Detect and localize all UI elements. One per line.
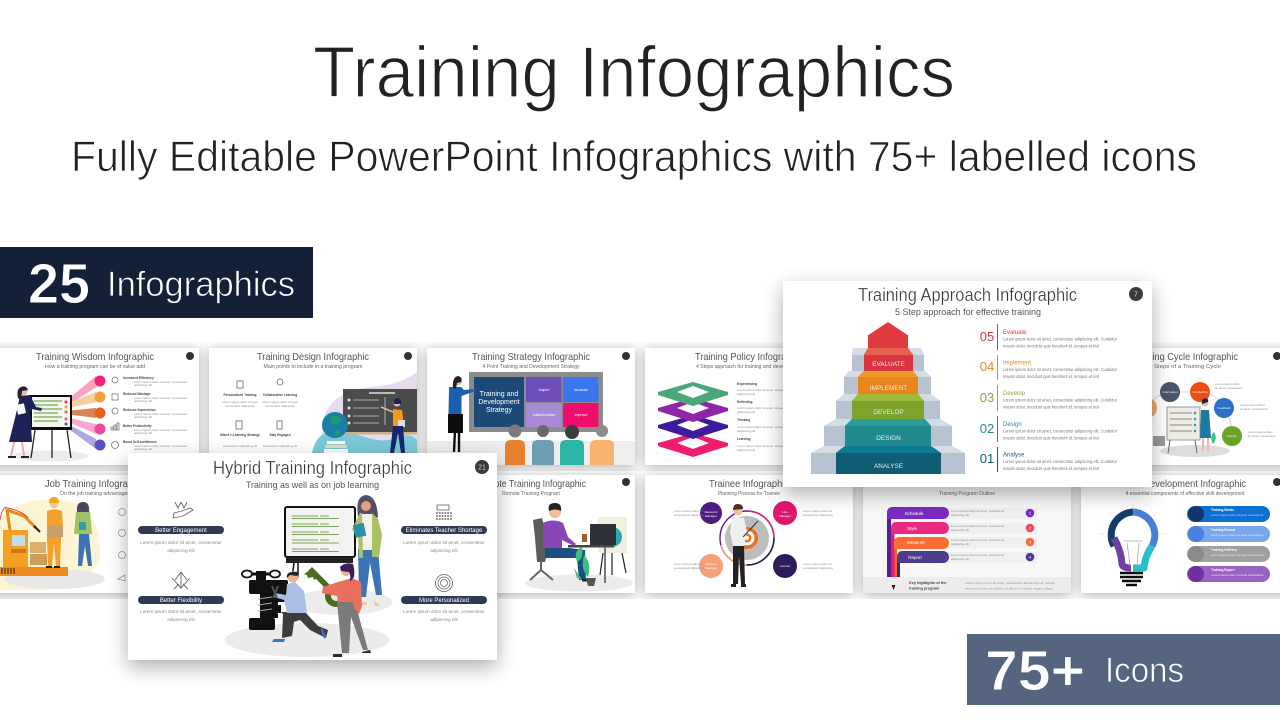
cycle nodes (1137, 382, 1242, 446)
slide heading: Training Wisdom Infographic (36, 351, 154, 363)
slide heading: Job Training Infographic (45, 478, 145, 490)
outline rows: 3 (1029, 540, 1032, 544)
step list: Experiencing (737, 382, 757, 386)
footer text (909, 581, 1055, 590)
step 01 text: Analyse (1003, 452, 1025, 458)
point list (123, 376, 187, 451)
small icons and labels: consectetur adipiscing elit (263, 444, 297, 448)
page badge (1129, 287, 1143, 301)
outline rows: Lorem ipsum dolor sit amet, consectetur (951, 509, 1004, 513)
slide heading: Training Design Infographic (257, 351, 369, 363)
outline rows: adipiscing elit (951, 557, 969, 561)
small icons and labels: Stay Engaged (269, 433, 291, 437)
man with arrow (730, 504, 758, 587)
step list (737, 382, 790, 452)
point list: Lorem ipsum dolor sit amet, consectetur (134, 428, 187, 432)
numbered circles (94, 376, 106, 450)
cycle nodes: Report (1227, 434, 1237, 438)
benefit: better engagement: Lorem ipsum dolor sit amet, consectetur (140, 540, 222, 545)
point list: Lorem ipsum dolor sit amet, consectetur (134, 444, 187, 448)
captions: Lorem ipsum dolor sit (803, 562, 832, 566)
arrow top (867, 322, 909, 348)
light bulb (1098, 504, 1167, 585)
step 04 text: mauris dolor, tincidunt quis hendrerit id, tempus at nisl (1003, 374, 1099, 379)
benefit icons (118, 508, 126, 581)
panel: job training slide (0, 475, 199, 593)
role nodes: Account (706, 562, 717, 566)
panel: skill development slide (1081, 475, 1280, 593)
outline rows: Style (907, 526, 917, 531)
beams to numbered circles (66, 376, 98, 449)
step: analyse: ANALYSE (874, 463, 903, 470)
illustration: trainer at board (1153, 398, 1230, 457)
role nodes: Learner (780, 564, 790, 568)
strategy board (469, 372, 603, 432)
benefit: better engagement: Better Engagement (155, 528, 207, 534)
step 03 text (980, 385, 1118, 411)
benefit: eliminates teacher shortage: Eliminates Teacher Shortage (406, 528, 483, 534)
footer text: Lorem ipsum dolor sit amet, consectetur adipiscing elit, sed do (965, 581, 1055, 585)
outline rows: 2 (1029, 526, 1032, 530)
captions: consectetur adipiscing (803, 566, 833, 570)
page badge (186, 352, 194, 360)
illustration: remote learner at desk (525, 503, 633, 592)
slide heading: Skill Development Infographic (1124, 478, 1246, 490)
point list: Lorem ipsum dolor sit amet, consectetur (134, 380, 187, 384)
step 01 text (980, 447, 1118, 472)
step 01 text: 01 (980, 451, 994, 466)
banner label: Icons (1105, 651, 1184, 690)
footer text: training program (909, 586, 940, 590)
step 02 text (980, 416, 1118, 442)
colleague (74, 502, 92, 566)
slide heading: Training Cycle Infographic (1132, 351, 1238, 363)
slide heading: Trainee Infographic (709, 478, 789, 490)
small icons and labels: consectetur adipiscing (265, 404, 295, 408)
strategy board: Training and (480, 391, 518, 398)
benefit: more personalized: adipiscing elit (430, 617, 459, 622)
benefit: better flexibility: adipiscing elit (167, 617, 196, 622)
slide subheading: How a training program can be of value add (45, 364, 145, 370)
step: analyse (836, 446, 941, 474)
captions: Lorem ipsum dolor sit (674, 509, 703, 513)
role nodes: Resource (705, 510, 718, 514)
component pills: Lorem ipsum dolor sit amet consectetur (1211, 533, 1264, 537)
point list: Boost Self-confidence (123, 440, 157, 444)
point list: Lorem ipsum dolor sit amet, consectetur (134, 412, 187, 416)
component pills: Lorem ipsum dolor sit amet consectetur (1211, 513, 1264, 517)
key (304, 569, 344, 604)
step: evaluate (864, 348, 913, 371)
step 04 text (980, 355, 1118, 380)
presenter (448, 376, 476, 452)
step 01 text: mauris dolor, tincidunt quis hendrerit id, tempus at nisl (1003, 466, 1099, 471)
slide subheading: Training Program Outline (939, 491, 995, 497)
panel: training wisdom slide (0, 348, 199, 465)
cycle nodes: Information (1162, 390, 1178, 394)
strategy board: Improve (575, 413, 587, 417)
point list: Lorem ipsum dolor sit amet, consectetur (134, 396, 187, 400)
panel: remote training slide (427, 475, 635, 593)
step list: Lorem ipsum dolor sit amet, consectetur (737, 425, 790, 429)
panel: training design slide (209, 348, 417, 465)
robot arm machine (0, 507, 68, 576)
step 01 text: Lorem ipsum dolor sit amet, consectetur adipiscing elit. Curabitur (1003, 459, 1118, 464)
strategy board: Institutionalize (533, 413, 555, 417)
footer text: Key highlights of the (909, 581, 947, 585)
step 02 text: Design (1003, 422, 1022, 428)
page badge (475, 460, 489, 474)
teal hill (312, 430, 417, 453)
strategy board: Inspire (539, 388, 549, 392)
step: implement: IMPLEMENT (870, 385, 907, 392)
step list: adipiscing elit (737, 392, 755, 396)
banner number: 25 (28, 252, 90, 316)
audience (505, 424, 614, 465)
component pills (1187, 506, 1270, 582)
node captions: Lorem ipsum dolor (1215, 382, 1240, 386)
benefit: eliminates teacher shortage: Lorem ipsum dolor sit amet, consectetur (403, 540, 485, 545)
slide heading: Remote Training Infographic (476, 478, 586, 490)
worker (46, 497, 63, 568)
small icons and labels: Lorem ipsum dolor sit amet (222, 400, 258, 404)
benefit: eliminates teacher shortage: adipiscing elit (430, 548, 459, 553)
outline rows: Report (908, 555, 922, 560)
woman with key (322, 563, 371, 657)
page badge (622, 352, 630, 360)
training board (285, 507, 355, 578)
small icons and labels: Personalized Training (224, 393, 257, 397)
step list: adipiscing elit (737, 429, 755, 433)
slide subheading: On the job training advantages (60, 491, 130, 497)
cycle nodes: Conducting (1192, 390, 1208, 394)
step 04 text: Implement (1003, 360, 1031, 366)
small icons and labels: Mixed e-Learning Strategy (220, 433, 260, 437)
slide heading: Training Policy Infographic (695, 351, 803, 363)
slide subheading: 5 Step approach for effective training (895, 307, 1041, 318)
stacked diamond rings (658, 382, 728, 457)
step list: Thinking (737, 418, 750, 422)
page badge (1273, 352, 1280, 360)
outline rows: Measure (907, 540, 925, 545)
point list: Reduced Wastage (123, 392, 151, 396)
step 02 text: 02 (980, 421, 994, 436)
boxes (30, 542, 47, 565)
outline rows: adipiscing elit (951, 542, 969, 546)
cycle nodes: Feedback (1217, 406, 1231, 410)
benefit: better flexibility (138, 572, 224, 622)
slide subheading: 4 Steps approach for training and development (696, 364, 802, 370)
step: evaluate: EVALUATE (872, 361, 905, 368)
captions: Lorem ipsum dolor sit (803, 509, 832, 513)
point list: Reduced Supervision (123, 408, 156, 412)
slide subheading: Training as well as on job learning (246, 480, 379, 491)
captions: consectetur adipiscing (674, 566, 704, 570)
step 05 text: Lorem ipsum dolor sit amet, consectetur adipiscing elit. Curabitur (1003, 336, 1118, 342)
page badge: 21 (478, 464, 486, 472)
step 03 text: Lorem ipsum dolor sit amet, consectetur adipiscing elit. Curabitur (1003, 398, 1118, 402)
small icons and labels: Collaborative Learning (263, 393, 297, 397)
kneeling man (272, 572, 328, 642)
component pills: Training Needs (1211, 508, 1234, 512)
benefit: better flexibility: Better Flexibility (160, 598, 202, 604)
panel: training approach slide (783, 281, 1152, 487)
step list: adipiscing elit (737, 410, 755, 414)
strategy board: Development (478, 399, 520, 406)
small icons and labels: Lorem ipsum dolor sit amet (262, 400, 298, 404)
step 03 text: 03 (980, 390, 994, 405)
panel: 25 infographics banner (0, 247, 313, 318)
page badge (622, 478, 630, 486)
benefit: eliminates teacher shortage (401, 505, 487, 553)
step 05 text: mauris dolor, tincidunt quis hendrerit id, tempus at nisl (1003, 344, 1099, 348)
outline rows: Lorem ipsum dolor sit amet, consectetur (951, 538, 1004, 542)
benefit: more personalized: More Personalized (419, 598, 469, 604)
outline rows: 4 (1029, 554, 1032, 560)
node captions: sit amet, consectetur (1248, 434, 1276, 438)
step 04 text: Lorem ipsum dolor sit amet, consectetur adipiscing elit. Curabitur (1003, 367, 1118, 372)
ground shadows (225, 589, 392, 657)
slide subheading: 6 Steps of a Training Cycle (1149, 364, 1221, 370)
banner number: 75+ (985, 639, 1085, 703)
teacher (381, 398, 405, 453)
panel: training cycle slide (1081, 348, 1280, 465)
outline rows: adipiscing elit (951, 513, 969, 517)
component pills: Lorem ipsum dolor sit amet consectetur (1211, 553, 1264, 557)
slide subheading: 4 essential components of effective skill development (1126, 491, 1245, 497)
captions: consectetur adipiscing (803, 513, 833, 517)
banner label: Infographics (107, 265, 295, 304)
step list: Learning (737, 437, 751, 441)
small icons and labels: consectetur adipiscing elit (223, 444, 257, 448)
step list: Lorem ipsum dolor sit amet, consectetur (737, 444, 790, 448)
point list: Better Productivity (123, 424, 152, 428)
step list: Reflecting (737, 400, 752, 404)
step 02 text: mauris dolor, tincidunt quis hendrerit id, tempus at nisl (1003, 436, 1099, 440)
panel: trainee slide (645, 475, 853, 593)
node captions (1215, 382, 1276, 438)
small icons and labels (220, 379, 298, 448)
role nodes: Line (782, 510, 788, 514)
step: implement (858, 371, 918, 394)
step 02 text: Lorem ipsum dolor sit amet, consectetur adipiscing elit. Curabitur (1003, 428, 1118, 434)
benefit: better engagement: adipiscing elit (167, 548, 196, 553)
panel: training strategy slide (427, 348, 635, 465)
slide subheading: 4 Point Training and Development Strategy (482, 364, 580, 370)
slide heading: Training Strategy Infographic (472, 351, 590, 363)
stair steps (811, 348, 965, 474)
panel: hybrid training slide (128, 453, 497, 660)
outline rows: 1 (1029, 510, 1032, 516)
step 04 text: 04 (980, 359, 994, 374)
panel: training policy slide (645, 348, 853, 465)
floor (427, 441, 635, 465)
slide heading: Training Approach Infographic (858, 285, 1077, 305)
page badge (1273, 478, 1280, 486)
globe (322, 412, 348, 453)
point list: adipiscing elit (134, 383, 152, 387)
benefit: more personalized: Lorem ipsum dolor sit amet, consectetur (403, 609, 485, 614)
outline rows: Lorem ipsum dolor sit amet, consectetur (951, 524, 1004, 528)
ground (5, 569, 105, 589)
step 05 text (980, 324, 1118, 350)
page badge: 7 (1134, 292, 1138, 298)
node captions: sit amet, consectetur (1215, 386, 1243, 390)
slide subheading: Planning Process for Trainee (718, 491, 780, 497)
step list: adipiscing elit (737, 448, 755, 452)
point list: adipiscing elit (134, 447, 152, 451)
role nodes: Manager (779, 514, 791, 518)
step: develop (852, 394, 924, 419)
captions: consectetur adipiscing (674, 513, 704, 517)
step: design: DESIGN (876, 435, 901, 442)
step: design (845, 419, 931, 446)
node captions: Lorem ipsum dolor (1248, 430, 1273, 434)
illustration: presenter at board (8, 386, 88, 462)
title: Training Infographics (313, 33, 955, 113)
point list: adipiscing elit (134, 431, 152, 435)
component pills: Training Format (1211, 528, 1236, 532)
subtitle: Fully Editable PowerPoint Infographics with 75+ labelled icons (71, 133, 1197, 181)
point list: Increased Efficiency (123, 376, 154, 380)
component pills: Lorem ipsum dolor sit amet consectetur (1211, 573, 1264, 577)
benefit: better flexibility: Lorem ipsum dolor sit amet, consectetur (140, 609, 222, 614)
role nodes (699, 501, 797, 578)
footer band (863, 577, 1071, 593)
panel: training program slide (863, 475, 1071, 593)
step 03 text: mauris dolor, tincidunt quis hendrerit id, tempus at nisl (1003, 404, 1099, 410)
icon column (111, 377, 119, 448)
chalkboard (343, 389, 417, 434)
component pills: Training Report (1211, 568, 1235, 572)
node captions: sit amet, consectetur (1240, 407, 1268, 411)
slide subheading: Main points to include in a training program (264, 364, 363, 370)
step 05 text: 05 (980, 329, 994, 344)
footer text: eiusmod tempor incididunt ut labore et dolore magna aliqua (965, 586, 1053, 590)
role nodes: Manager (705, 566, 717, 570)
outline rows: Schedule (905, 511, 924, 516)
outline rows: Lorem ipsum dolor sit amet, consectetur (951, 553, 1004, 557)
point list: adipiscing elit (134, 415, 152, 419)
step list: Lorem ipsum dolor sit amet, consectetur (737, 406, 790, 410)
step 03 text: Develop (1003, 391, 1026, 397)
outline rows (887, 507, 1037, 563)
machine (242, 570, 288, 630)
component pills: Training Delivery (1211, 548, 1237, 552)
small icons and labels: consectetur adipiscing (225, 404, 255, 408)
step list: Lorem ipsum dolor sit amet, consectetur (737, 388, 790, 392)
role nodes: Manager (705, 514, 717, 518)
outline rows: adipiscing elit (951, 528, 969, 532)
captions (674, 509, 833, 570)
step 05 text: Evaluate (1003, 330, 1027, 336)
background blob (312, 372, 417, 453)
slide heading: Hybrid Training Infographic (213, 458, 412, 478)
slide subheading: Remote Training Program (502, 491, 560, 497)
step: develop: DEVELOP (873, 409, 904, 416)
pencil stems (887, 515, 900, 592)
panel: 75+ icons banner (967, 634, 1280, 705)
page badge (404, 352, 412, 360)
standing woman (352, 495, 382, 606)
captions: Lorem ipsum dolor sit (674, 562, 703, 566)
yellow backdrop (0, 499, 100, 590)
strategy board: Strategy (486, 407, 513, 414)
strategy board: Inculcate (574, 388, 588, 392)
node captions: Lorem ipsum dolor (1240, 403, 1265, 407)
benefit: more personalized (401, 574, 487, 622)
benefit: better engagement (138, 502, 224, 553)
target ring (720, 511, 774, 565)
point list: adipiscing elit (134, 399, 152, 403)
